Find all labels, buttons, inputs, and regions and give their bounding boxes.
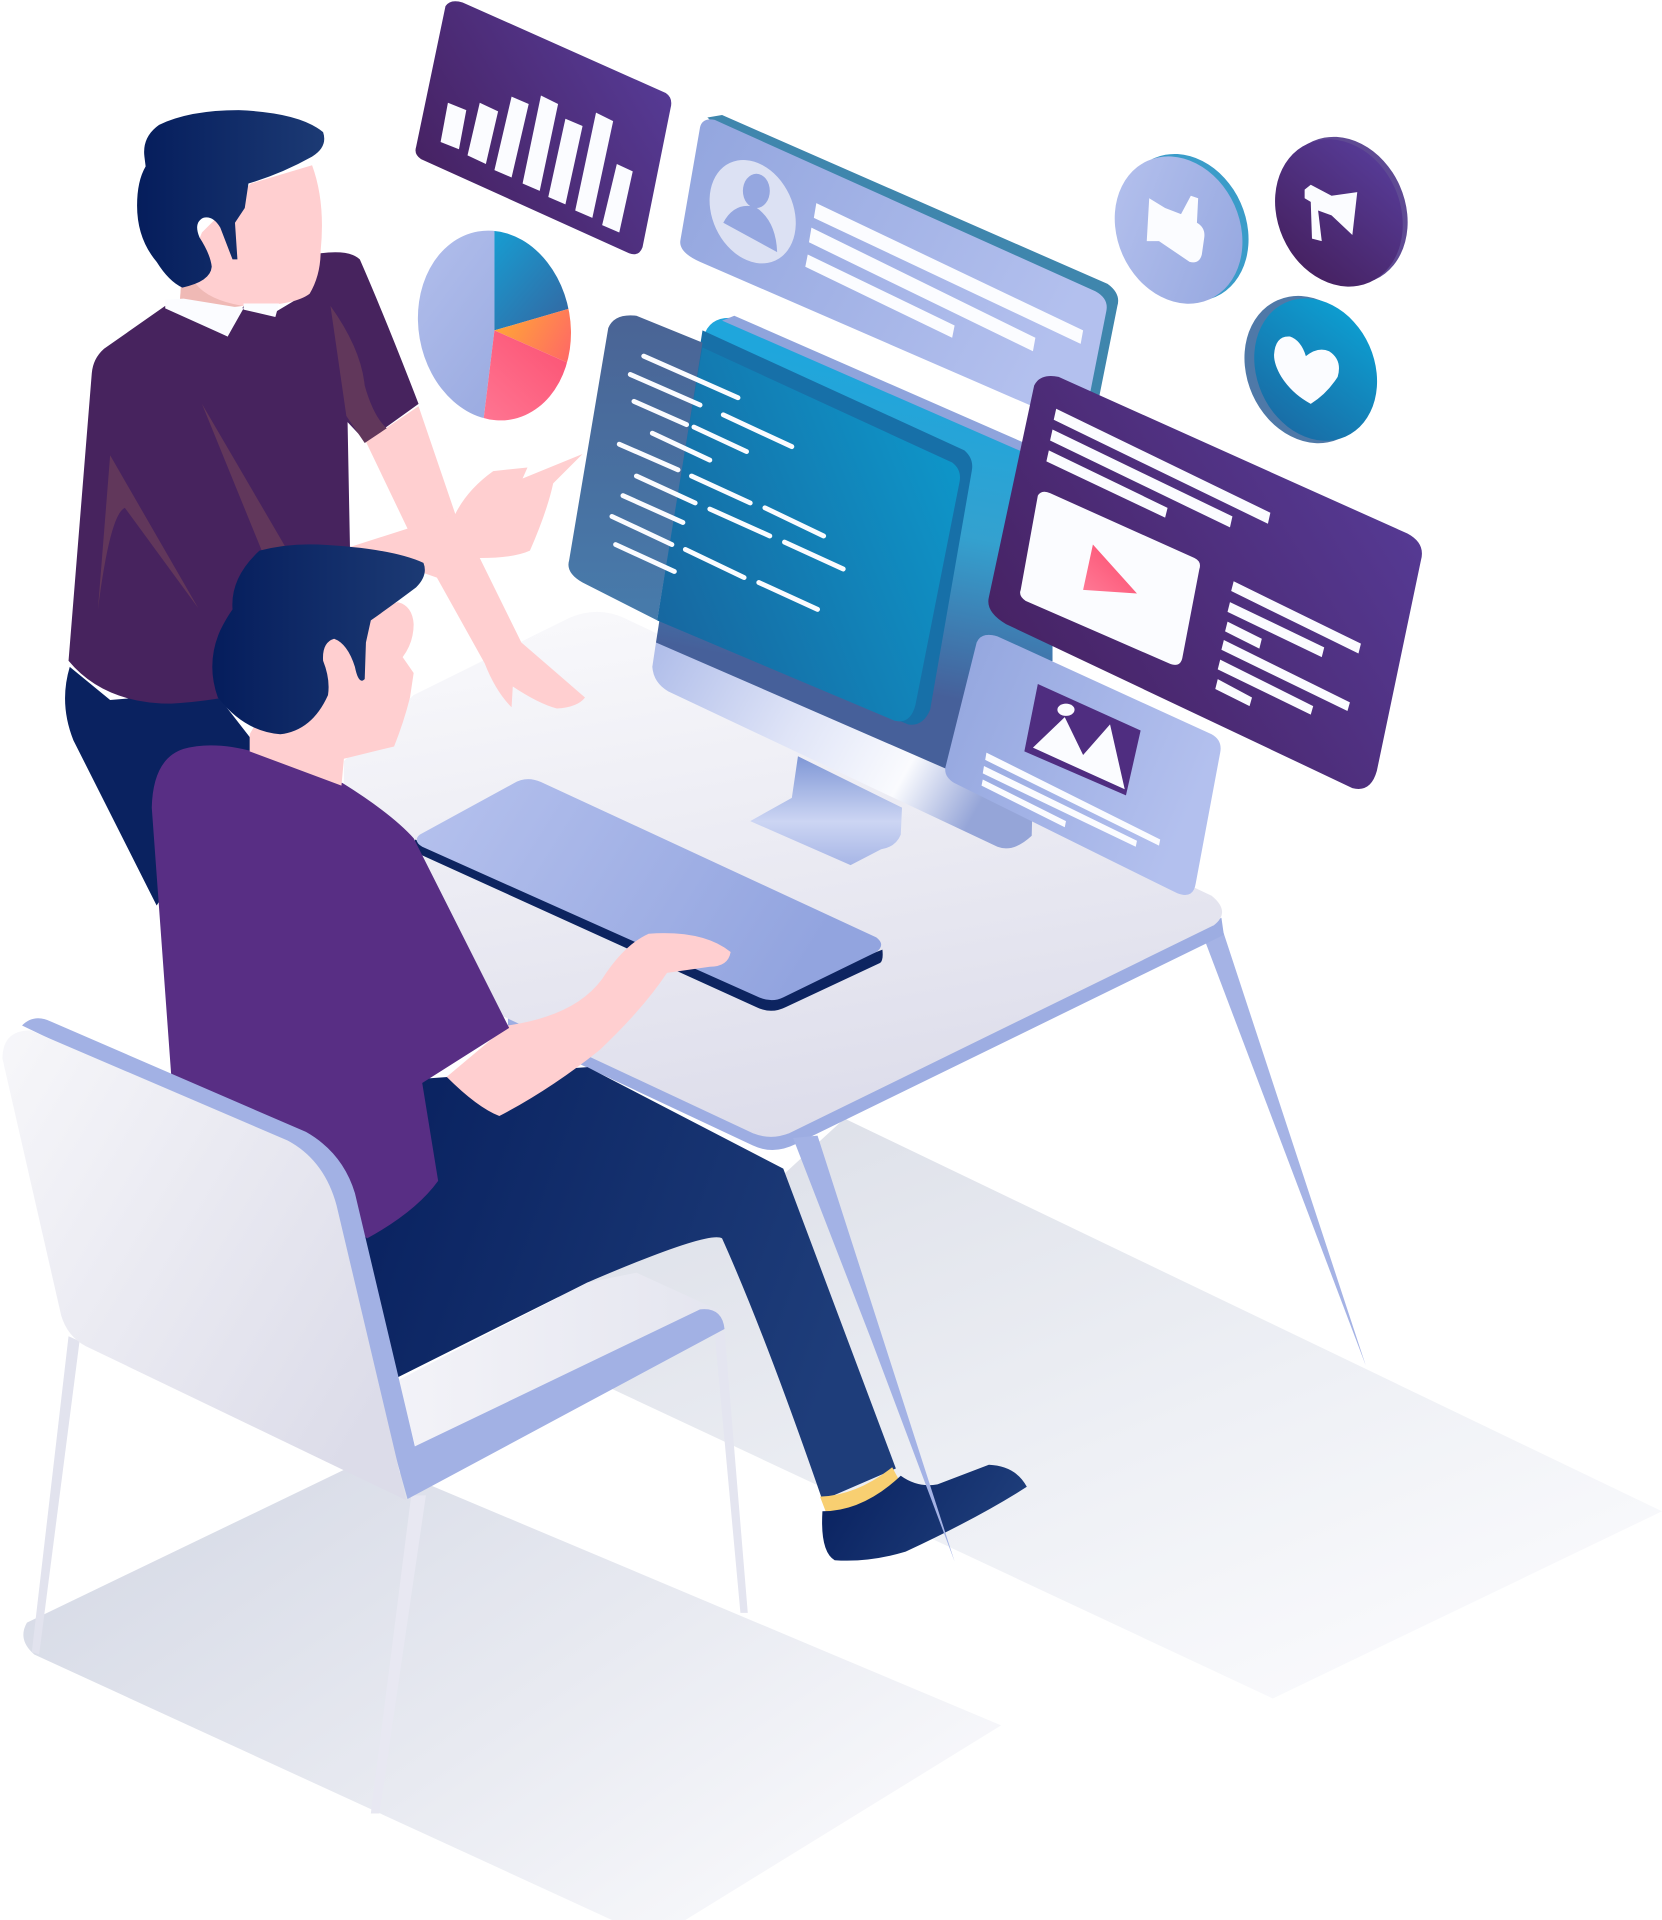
image card	[945, 635, 1221, 895]
card body	[988, 376, 1422, 789]
desk edge	[508, 918, 1224, 1150]
coin face	[1232, 279, 1399, 461]
avatar figure	[723, 174, 777, 252]
standing person hair	[137, 110, 324, 288]
pie slice: pink	[484, 330, 567, 420]
monitor	[568, 315, 1053, 865]
chair seat	[398, 1273, 722, 1449]
pie slice: blue	[494, 231, 568, 330]
coin face	[1092, 136, 1265, 324]
person standing	[65, 110, 585, 906]
play triangle	[1083, 545, 1137, 593]
standing person pointing hand	[350, 454, 583, 578]
icon: heart	[1222, 275, 1399, 464]
seated person neck and face	[250, 602, 414, 786]
keyboard	[415, 779, 883, 1011]
body lines	[1215, 581, 1361, 715]
neck shadow	[180, 284, 242, 308]
desk top	[344, 612, 1222, 1137]
screen panel right shadow	[657, 330, 972, 725]
monitor chin	[652, 642, 1035, 848]
seated person trousers	[362, 1067, 896, 1500]
card body	[945, 635, 1221, 895]
heading lines	[1046, 409, 1270, 527]
card body	[416, 1, 671, 254]
code lines	[612, 356, 843, 609]
desk right leg	[1206, 930, 1366, 1366]
monitor stand	[750, 756, 902, 865]
picture frame	[1024, 684, 1141, 795]
pie slice: large periwinkle	[418, 230, 494, 418]
seated person arm and hand	[447, 933, 731, 1116]
seated person shoe	[822, 1465, 1027, 1561]
standing person trousers	[65, 667, 257, 906]
megaphone glyph	[1305, 185, 1357, 241]
coin edge	[1222, 275, 1395, 464]
pie slice: orange	[494, 308, 571, 362]
icon: megaphone	[1252, 116, 1431, 307]
video card	[988, 376, 1422, 789]
text lines	[982, 753, 1160, 847]
seated person shirt	[152, 745, 509, 1238]
icon: thumbs up	[1092, 133, 1271, 324]
chair frame	[22, 1018, 725, 1499]
desk	[344, 612, 1224, 1150]
seated person sock	[820, 1467, 901, 1513]
coin edge	[1257, 116, 1431, 305]
shirt creases	[98, 306, 387, 609]
standing person lower arm	[366, 406, 585, 709]
coin face	[1252, 119, 1426, 307]
screen panel overlapping monitor	[657, 348, 960, 721]
pie chart	[418, 230, 571, 420]
standing person face and neck	[180, 165, 322, 307]
bars	[441, 95, 633, 233]
code panel left glass	[568, 315, 702, 620]
text lines	[805, 203, 1083, 351]
seated person hair	[212, 544, 425, 734]
keyboard top	[417, 779, 881, 1000]
monitor bezel	[656, 318, 1053, 783]
card body	[680, 119, 1107, 428]
chair	[2, 1018, 748, 1814]
keyboard underside	[415, 839, 883, 1011]
standing person shirt	[69, 252, 419, 704]
chair leg front	[371, 1495, 426, 1814]
avatar	[693, 146, 812, 278]
floor shadow: chair	[23, 1459, 1001, 1920]
chair leg left	[32, 1336, 80, 1654]
person seated	[152, 544, 1027, 1561]
desk front leg	[793, 1136, 955, 1561]
coin edge	[1098, 133, 1271, 322]
monitor bezel top edge	[722, 316, 1053, 465]
video frame	[1020, 492, 1200, 665]
picture mountains	[1033, 717, 1125, 789]
heart glyph	[1274, 336, 1339, 404]
chair back	[2, 1030, 406, 1500]
picture sun	[1057, 704, 1075, 716]
chair leg rear right	[715, 1331, 748, 1613]
bar chart card	[416, 1, 671, 254]
profile card	[680, 115, 1118, 428]
card edge	[707, 115, 1118, 416]
floor shadow: desk	[551, 1118, 1662, 1699]
thumb glyph	[1147, 196, 1204, 262]
standing person collar	[165, 299, 279, 337]
